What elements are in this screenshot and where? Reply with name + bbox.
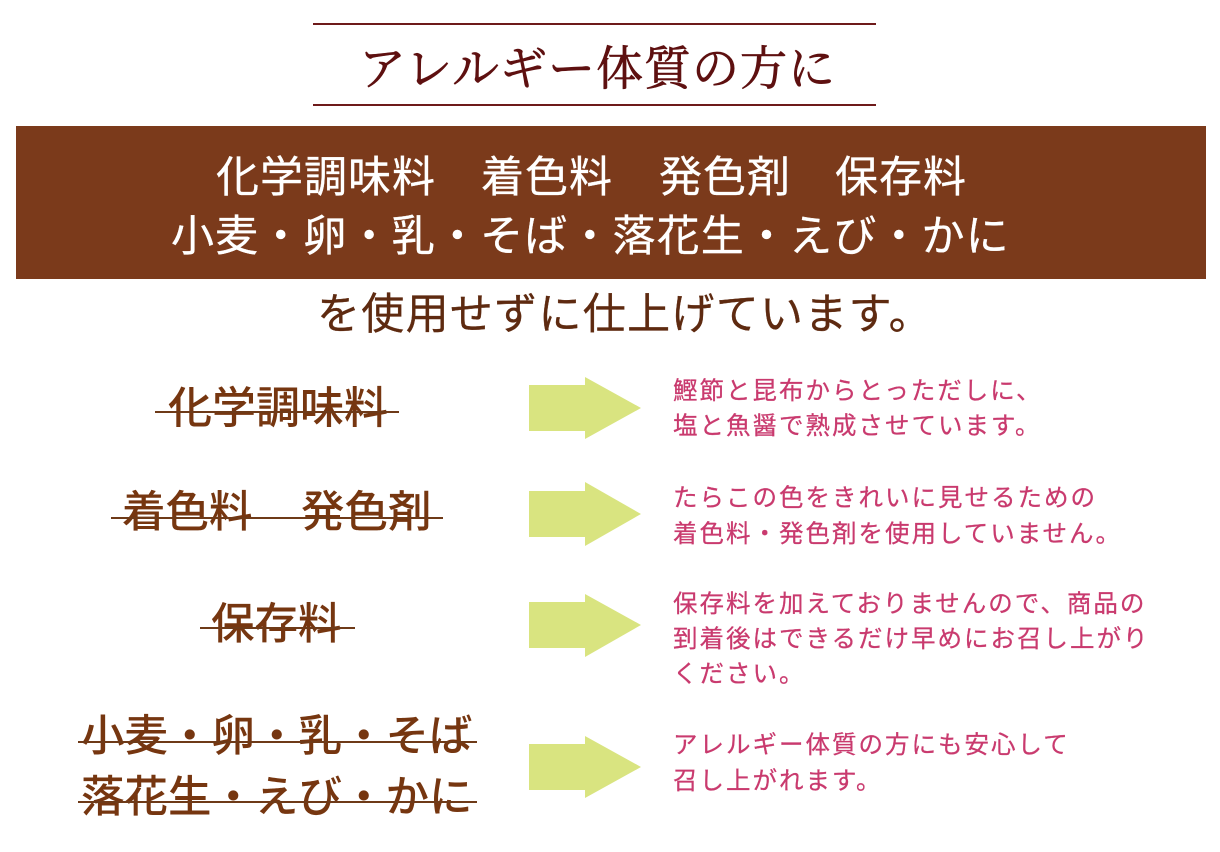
banner: excluded ingredients: 小麦・卵・乳・そば・落花生・えび・かに bbox=[171, 213, 1010, 261]
banner: excluded ingredients: 着色料 bbox=[481, 154, 613, 202]
banner: excluded ingredients bbox=[16, 126, 1206, 279]
row 2 text bbox=[673, 485, 1122, 548]
row 4 label: 小麦・卵・乳・そば bbox=[81, 713, 472, 761]
row 1 text: 鰹節と昆布からとっただしに、 bbox=[673, 378, 1043, 405]
row 3 text: ください。 bbox=[673, 661, 806, 688]
arrow 2 bbox=[529, 482, 641, 546]
row 3 text: 保存料を加えておりませんので、商品の bbox=[673, 591, 1146, 618]
title: アレルギー体質の方に bbox=[359, 44, 836, 96]
row 3 label: 保存料 bbox=[211, 601, 342, 649]
arrow 1 bbox=[529, 377, 641, 439]
row 2 text: たらこの色をきれいに見せるための bbox=[673, 485, 1097, 512]
arrow 4 bbox=[529, 736, 641, 798]
row 2 label: 着色料 bbox=[122, 489, 252, 537]
row 1 label: 化学調味料 bbox=[168, 384, 388, 433]
row 1 text: 塩と魚醤で熟成させています。 bbox=[673, 413, 1042, 440]
banner: excluded ingredients: 化学調味料 bbox=[216, 154, 436, 202]
row 2 label: 発色剤 bbox=[301, 489, 432, 537]
banner: excluded ingredients: 保存料 bbox=[835, 154, 967, 202]
row 1 text bbox=[673, 378, 1043, 440]
row 3 text: 到着後はできるだけ早めにお召し上がり bbox=[673, 626, 1150, 653]
row 4 label bbox=[78, 713, 477, 822]
row 4 text: アレルギー体質の方にも安心して bbox=[673, 732, 1070, 759]
row 4 text bbox=[673, 732, 1070, 795]
row 3 text bbox=[673, 591, 1150, 688]
row 4 text: 召し上がれます。 bbox=[673, 768, 883, 795]
banner: excluded ingredients: 発色剤 bbox=[659, 154, 791, 202]
row 2 text: 着色料・発色剤を使用していません。 bbox=[673, 521, 1122, 548]
row 4 label: 落花生・えび・かに bbox=[81, 774, 472, 822]
arrow 3 bbox=[529, 594, 641, 657]
row 2 label bbox=[111, 489, 443, 537]
subheading: を使用せずに仕上げています。 bbox=[317, 291, 933, 339]
